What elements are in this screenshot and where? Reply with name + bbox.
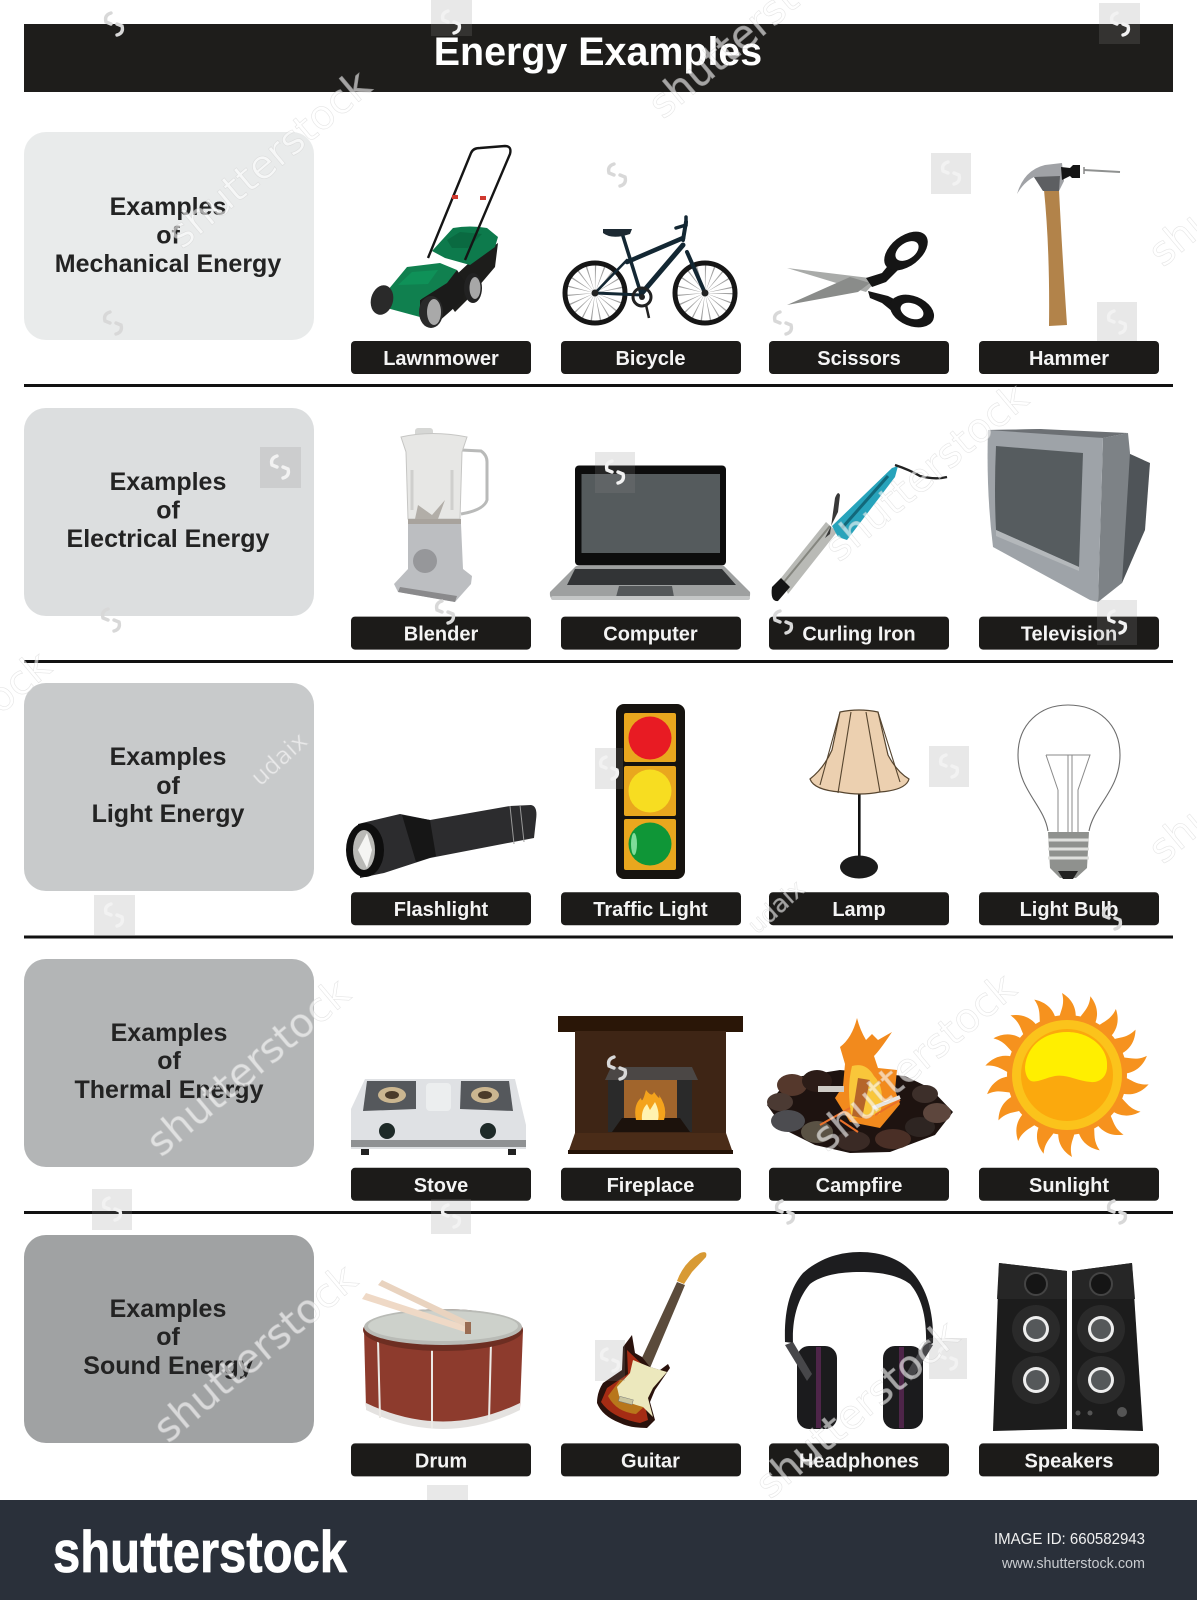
row: electrical energy	[24, 408, 1159, 650]
label: flashlight: Flashlight	[394, 899, 489, 921]
label: speakers	[979, 1443, 1159, 1476]
label: campfire	[769, 1168, 949, 1201]
icon: computer	[550, 466, 750, 600]
label: blender	[351, 617, 531, 650]
icon: traffic light	[616, 704, 685, 879]
icon: blender	[394, 428, 487, 602]
label: light bulb: Light Bulb	[1020, 899, 1118, 921]
watermark overlays: shutterstock	[804, 964, 1026, 1161]
panel: examples of electrical energy: of	[156, 496, 180, 524]
icon: lawnmower	[367, 146, 510, 328]
row: mechanical energy	[24, 132, 1159, 374]
label: stove: Stove	[414, 1175, 468, 1197]
panel: examples of sound energy: Sound Energy	[83, 1352, 253, 1380]
label: curling iron	[769, 617, 949, 650]
label: traffic light: Traffic Light	[593, 899, 708, 921]
panel: examples of thermal energy: of	[157, 1047, 181, 1075]
panel: examples of light energy: of	[156, 772, 180, 800]
footer bar	[0, 1500, 1197, 1600]
label: lamp	[769, 892, 949, 925]
panel: examples of light energy: Light Energy	[92, 800, 244, 828]
watermark overlays: shutterstock	[138, 969, 360, 1166]
icon: speakers	[993, 1263, 1143, 1431]
label: sunlight	[979, 1168, 1159, 1201]
panel: examples of light energy: Examples	[110, 743, 226, 771]
icon: sun	[985, 993, 1149, 1157]
label: flashlight	[351, 892, 531, 925]
watermark overlays: udaix	[245, 726, 313, 791]
icon: drum	[362, 1280, 523, 1429]
label: computer: Computer	[603, 624, 698, 646]
label: computer	[561, 617, 741, 650]
label: hammer: Hammer	[1029, 348, 1109, 370]
label: speakers: Speakers	[1025, 1450, 1113, 1472]
website: www.shutterstock.com	[1001, 1555, 1145, 1572]
icon: flashlight	[346, 805, 536, 878]
icon: television	[988, 429, 1150, 602]
panel: examples of sound energy	[24, 1235, 314, 1443]
label: lawnmower: Lawnmower	[383, 348, 499, 370]
panel: examples of mechanical energy: Examples	[110, 193, 226, 221]
label: headphones	[769, 1443, 949, 1476]
label: television: Television	[1021, 624, 1117, 646]
title bar: Energy Examples	[434, 30, 762, 74]
label: television	[979, 617, 1159, 650]
icon: campfire	[767, 1018, 953, 1153]
row: light energy	[24, 683, 1159, 925]
icon: hammer	[1017, 163, 1120, 326]
label: fireplace: Fireplace	[607, 1175, 694, 1197]
label: lamp: Lamp	[832, 899, 886, 921]
watermark overlays: udaix	[742, 874, 810, 939]
icon: stove	[351, 1079, 526, 1155]
panel: examples of thermal energy	[24, 959, 314, 1167]
label: campfire: Campfire	[816, 1175, 902, 1197]
panel: examples of thermal energy: Examples	[111, 1019, 227, 1047]
icon: curling iron	[772, 465, 947, 601]
label: stove	[351, 1168, 531, 1201]
icon: bicycle	[565, 217, 735, 323]
panel: examples of mechanical energy: Mechanical Energy	[55, 250, 281, 278]
label: fireplace	[561, 1168, 741, 1201]
label: bicycle	[561, 341, 741, 374]
label: curling iron: Curling Iron	[802, 624, 916, 646]
row: thermal energy	[24, 959, 1159, 1201]
icon: scissors	[787, 224, 939, 334]
watermark overlays: shutterstock	[145, 1255, 367, 1452]
panel: examples of mechanical energy	[24, 132, 314, 340]
label: guitar: Guitar	[621, 1450, 680, 1472]
panel: examples of sound energy: Examples	[110, 1295, 226, 1323]
label: guitar	[561, 1443, 741, 1476]
label: sunlight: Sunlight	[1029, 1175, 1109, 1197]
icon: light bulb	[1018, 705, 1120, 879]
panel: examples of electrical energy: Examples	[110, 468, 226, 496]
watermark overlays: shutterstock	[159, 61, 381, 258]
label: bicycle: Bicycle	[615, 348, 686, 370]
label: drum	[351, 1443, 531, 1476]
icon: guitar	[597, 1252, 706, 1428]
label: drum: Drum	[415, 1450, 467, 1472]
icon: lamp	[810, 710, 909, 878]
panel: examples of light energy	[24, 683, 314, 891]
watermark overlays: shutterstock	[747, 1311, 969, 1508]
image id: IMAGE ID: 660582943	[994, 1531, 1145, 1548]
watermark overlays: shutterstock	[816, 374, 1038, 571]
panel: examples of electrical energy	[24, 408, 314, 616]
label: headphones: Headphones	[799, 1450, 919, 1472]
title bar	[24, 24, 1173, 92]
label: blender: Blender	[404, 624, 478, 646]
panel: examples of sound energy: of	[156, 1323, 180, 1351]
panel: examples of thermal energy: Thermal Energy	[75, 1076, 264, 1104]
label: lawnmower	[351, 341, 531, 374]
panel: examples of mechanical energy: of	[156, 222, 180, 250]
icon: fireplace	[558, 1016, 743, 1154]
panel: examples of electrical energy: Electrical Energy	[67, 525, 270, 553]
label: light bulb	[979, 892, 1159, 925]
label: scissors: Scissors	[817, 348, 901, 370]
label: traffic light	[561, 892, 741, 925]
row: sound energy	[24, 1235, 1159, 1476]
label: scissors	[769, 341, 949, 374]
footer logo: shutterstock	[53, 1520, 348, 1585]
label: hammer	[979, 341, 1159, 374]
icon: headphones	[785, 1252, 933, 1429]
